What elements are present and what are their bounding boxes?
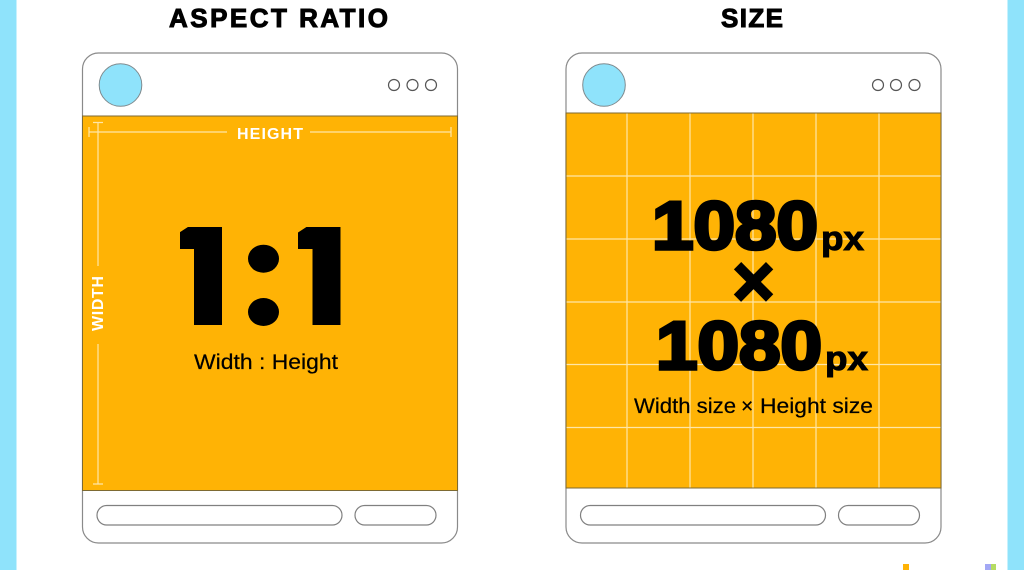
size caption	[634, 395, 873, 418]
panel: aspect ratio phone frame	[82, 53, 458, 543]
menu dots	[872, 80, 920, 90]
ratio value: 1	[170, 198, 248, 355]
multiply sign: ×	[732, 242, 775, 322]
width value: 1080	[652, 188, 818, 264]
caption bar	[580, 506, 826, 525]
height value: 1080	[656, 308, 822, 384]
orange image area	[566, 113, 941, 488]
size caption: Height size	[760, 395, 873, 418]
width dimension line	[93, 122, 103, 484]
heading: size: SIZE	[721, 3, 783, 33]
caption bar	[97, 506, 342, 525]
height label: HEIGHT	[237, 126, 303, 143]
profile avatar	[583, 64, 625, 106]
menu dots	[388, 80, 436, 90]
action button	[838, 506, 920, 525]
heading: aspect ratio: ASPECT RATIO	[169, 3, 388, 33]
size caption: ×	[741, 395, 753, 418]
orange image area	[82, 116, 458, 490]
width label: WIDTH	[90, 276, 107, 331]
ratio value: 1	[288, 198, 366, 355]
width unit: px	[821, 220, 864, 258]
ratio value	[180, 227, 340, 326]
action button	[355, 506, 436, 525]
pixel grid	[566, 114, 940, 488]
panel: size phone frame	[566, 53, 941, 543]
height dimension line	[89, 127, 451, 137]
height unit: px	[825, 340, 868, 378]
size caption: Width size	[634, 395, 736, 418]
profile avatar	[99, 64, 142, 106]
ratio value: :	[240, 195, 287, 352]
right side band	[1008, 0, 1024, 570]
logo fragments	[903, 564, 996, 570]
left side band	[0, 0, 16, 570]
ratio caption: Width : Height	[194, 351, 338, 374]
